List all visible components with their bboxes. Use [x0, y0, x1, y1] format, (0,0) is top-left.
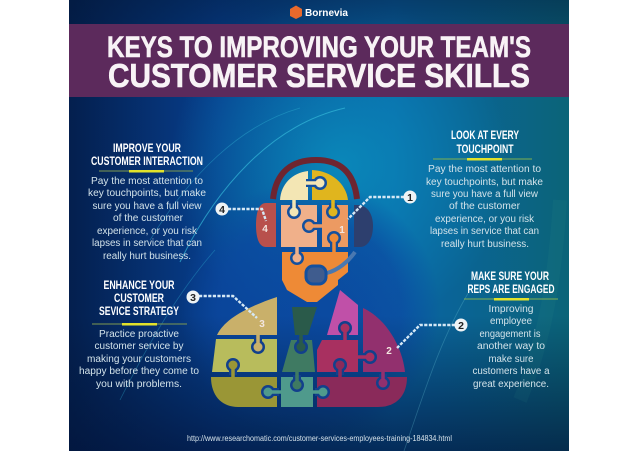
- right ear cup: [354, 205, 373, 247]
- panel: make sure your reps are engaged: [464, 271, 558, 390]
- body text: experience, or you risk: [97, 226, 198, 237]
- body text: Practice proactive: [99, 329, 179, 340]
- body text: Pay the most attention to: [91, 176, 203, 187]
- body puzzle pieces: [211, 290, 407, 407]
- body text: making your customers: [87, 354, 191, 365]
- body text: great experience.: [473, 379, 549, 390]
- callout 3: [186, 290, 265, 330]
- body text: sure you have a full view: [431, 189, 539, 200]
- icon: logo hexagon: [290, 6, 302, 19]
- body text: sure you have a full view: [92, 201, 202, 212]
- microphone boom: [327, 252, 355, 273]
- body text: [88, 176, 206, 262]
- head puzzle pieces: [280, 170, 348, 247]
- panel: look at every touchpoint: [426, 130, 543, 250]
- heading: [91, 143, 203, 168]
- puzzle knobs: [226, 176, 390, 399]
- heading: [99, 280, 179, 318]
- background: [69, 0, 569, 451]
- body text: Pay the most attention to: [428, 164, 541, 175]
- heading: REPS ARE ENGAGED: [468, 284, 554, 296]
- body text: really hurt business.: [103, 251, 191, 262]
- source url: http://www.researchomatic.com/customer-services-employees-training-184834.html: [187, 434, 452, 443]
- body text: customer service by: [94, 341, 184, 352]
- headband: [273, 160, 357, 199]
- callout 4: 4: [262, 224, 268, 235]
- panel: enhance your customer service strategy: [79, 280, 199, 390]
- left ear cup: [256, 203, 276, 247]
- callout 2: 2: [458, 320, 464, 332]
- body text: customers have a: [472, 366, 550, 377]
- heading: CUSTOMER INTERACTION: [91, 156, 203, 168]
- heading: ENHANCE YOUR: [104, 280, 175, 292]
- logo: [290, 6, 348, 19]
- heading: TOUCHPOINT: [456, 144, 514, 156]
- body text: lapses in service that can: [92, 238, 202, 249]
- body text: [472, 304, 550, 390]
- body text: experience, or you risk: [435, 214, 535, 225]
- body text: really hurt business.: [441, 239, 529, 250]
- title line 1: KEYS TO IMPROVING YOUR TEAM'S: [107, 31, 531, 64]
- body text: key touchpoints, but make: [426, 177, 543, 188]
- body text: another way to: [477, 341, 545, 352]
- heading: CUSTOMER: [114, 293, 165, 305]
- body text: Improving: [488, 304, 534, 315]
- body text: lapses in service that can: [430, 226, 539, 237]
- callout 3: 3: [259, 319, 265, 330]
- title banner: [69, 24, 569, 97]
- callout 1: 1: [407, 192, 413, 204]
- figure: puzzle person with headset: [211, 160, 407, 407]
- panel: improve your customer interaction: [88, 143, 206, 262]
- callout 4: 4: [219, 204, 225, 216]
- title line 2: CUSTOMER SERVICE SKILLS: [108, 57, 530, 94]
- callout 4: [216, 202, 268, 235]
- face and neck: [282, 252, 348, 302]
- heading: LOOK AT EVERY: [451, 130, 519, 142]
- callout 3: 3: [190, 292, 196, 304]
- callout 1: 1: [339, 225, 345, 236]
- body text: of the customer: [449, 201, 521, 212]
- callout 2: [386, 318, 468, 357]
- callout 1: [339, 190, 416, 236]
- body text: employee: [490, 316, 532, 327]
- body text: you with problems.: [96, 379, 182, 390]
- heading: IMPROVE YOUR: [113, 143, 182, 155]
- microphone head: [306, 266, 326, 284]
- body text: [426, 164, 543, 250]
- heading: MAKE SURE YOUR: [471, 271, 550, 283]
- heading: SEVICE STRATEGY: [99, 306, 179, 318]
- heading: [468, 271, 554, 296]
- body text: happy before they come to: [79, 366, 199, 377]
- logo name: Bornevia: [305, 7, 348, 19]
- body text: make sure: [488, 354, 534, 365]
- heading: [451, 130, 519, 156]
- body text: of the customer: [113, 213, 184, 224]
- body text: key touchpoints, but make: [88, 188, 206, 199]
- body text: [79, 329, 199, 390]
- callout 2: 2: [386, 346, 392, 357]
- body text: engagement is: [480, 329, 540, 340]
